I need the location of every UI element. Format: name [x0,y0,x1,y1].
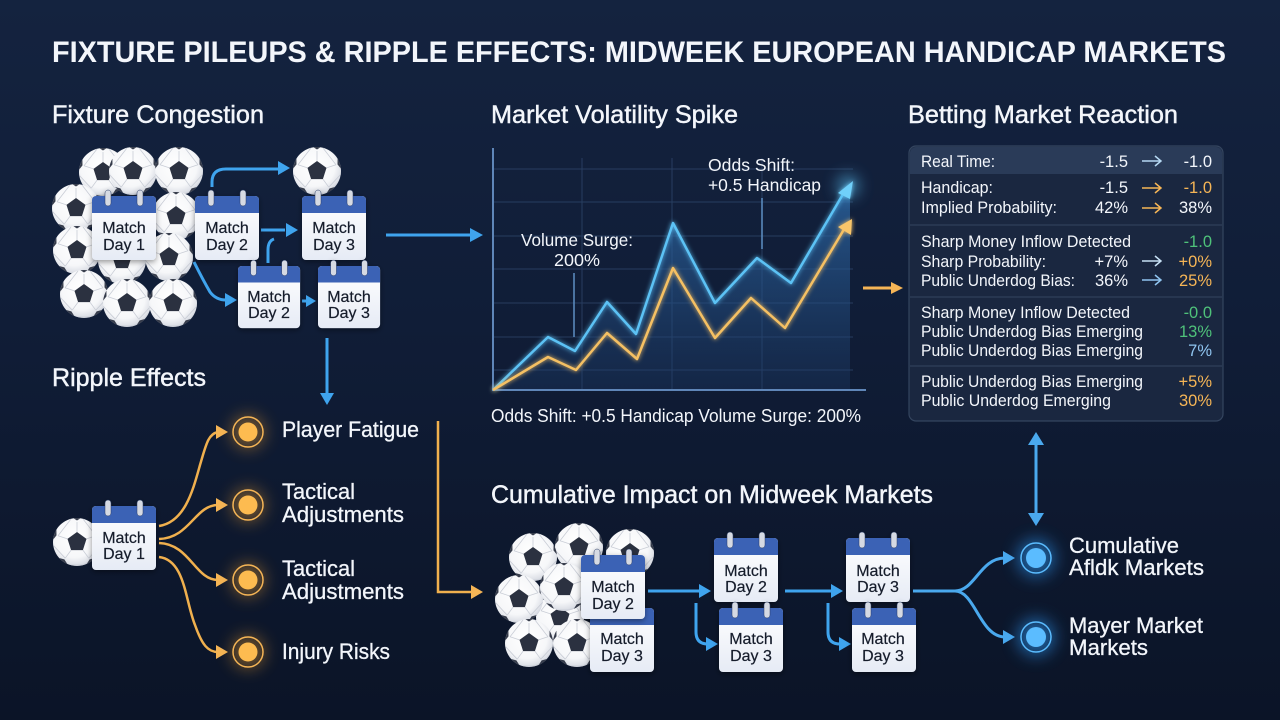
arrows: congestion flow [194,161,316,307]
arrow: two-way market link [1028,432,1044,526]
row: underdog emerging 30 percent: 30% [1179,392,1212,410]
calendar: right match day 3 upper [846,532,910,602]
calendar: right match day 3 lower: Day 3 [862,648,904,665]
row: sharp probability: +0% [1179,253,1212,271]
label: mayer market: Markets [1069,635,1148,660]
row: real time: -1.5 [1100,153,1128,171]
calendar: middle match day 2 [714,532,778,602]
calendar: match day 3 lower: Match [327,289,371,306]
arrow: ripple effects to cumulative impact [438,421,483,599]
panel: fixture congestion diagram [51,146,380,328]
calendar: match day 2 in pile [581,549,645,619]
heading: ripple effects: Ripple Effects [52,364,206,392]
row: bias emerging 7 percent: Public Underdog Bias Emerging [921,342,1143,360]
label: tactical adjustments 1 [282,479,404,527]
row: sharp probability: Sharp Probability: [921,253,1046,271]
series: volume line amber [493,219,852,390]
node: tactical adjustments 1 [231,488,265,522]
calendar: middle match day 3: Day 3 [730,648,772,665]
row: bias emerging 5 percent: +5% [1179,373,1212,391]
leader lines [574,198,762,337]
calendar: match day 3 [302,190,366,260]
panel: ripple effects diagram [52,415,419,669]
calendar: right match day 3 lower: Match [861,631,905,648]
arrow: congestion to ripple effects [320,338,334,405]
calendar: match day 2: Match [205,220,249,237]
calendar: lower match day 3 in pile: Match [600,631,644,648]
icon: soccer ball group [494,522,655,667]
node: mayer market [1017,618,1055,656]
row: sharp money inflow: Sharp Money Inflow Detected [921,233,1131,251]
row: bias emerging 13 percent: 13% [1179,323,1212,341]
heading: fixture congestion: Fixture Congestion [52,101,264,129]
heading: market volatility spike: Market Volatility Spike [491,101,738,129]
calendar: middle match day 3 [719,602,783,672]
row: bias emerging 13 percent: Public Underdog Bias Emerging [921,323,1143,341]
row: underdog emerging 30 percent: Public Underdog Emerging [921,392,1111,410]
label: tactical adjustments 2 [282,556,404,604]
calendar: match day 2 in pile: Match [591,579,635,596]
row: implied probability: 42% [1095,199,1128,217]
label: player fatigue: Player Fatigue [282,417,419,442]
label: injury risks: Injury Risks [282,639,390,664]
heading: betting market reaction: Betting Market Reaction [908,101,1178,129]
callout: volume surge: Volume Surge: [521,230,633,250]
label: mayer market [1069,613,1203,660]
row: sharp money inflow second: -0.0 [1184,304,1212,322]
row: bias emerging 5 percent: Public Underdog Bias Emerging [921,373,1143,391]
calendar: match day 3 lower: Day 3 [328,305,370,322]
label: tactical adjustments 2: Adjustments [282,579,404,604]
calendar: middle match day 2: Day 2 [725,579,767,596]
node: player fatigue [231,415,265,449]
chart axes [493,148,866,390]
calendar: match day 2: Day 2 [206,237,248,254]
calendar: match day 1 source: Match [102,530,146,547]
arrow: congestion to chart [386,228,483,242]
chart area fill [493,183,850,390]
row: sharp probability [921,253,1212,271]
calendar: match day 3: Day 3 [313,237,355,254]
calendar: right match day 3 upper: Match [856,563,900,580]
label: cumulative markets: Cumulative [1069,533,1179,558]
line chart: market volatility [493,148,866,390]
calendar: match day 2 [195,190,259,260]
row: handicap: Handicap: [921,179,993,197]
row: sharp probability: +7% [1095,253,1128,271]
row: implied probability [921,199,1212,217]
calendar: match day 3: Match [312,220,356,237]
row: sharp money inflow second: Sharp Money Inflow Detected [921,304,1130,322]
calendar: match day 2 lower: Day 2 [248,305,290,322]
arrow: chart to market reaction [863,282,903,294]
row: handicap [921,179,1212,197]
row: real time: Real Time: [921,153,995,171]
arrows: ripple branches [159,425,228,659]
calendar: match day 1: Match [102,220,146,237]
row: sharp money inflow: -1.0 [1184,233,1212,251]
label: cumulative markets: Afldk Markets [1069,555,1204,580]
row: public underdog bias: Public Underdog Bias: [921,272,1075,290]
calendar: middle match day 3: Match [729,631,773,648]
row: implied probability: 38% [1179,199,1212,217]
calendar: match day 1 source [92,500,156,570]
title: FIXTURE PILEUPS & RIPPLE EFFECTS: MIDWEEK EUROPEAN HANDICAP MARKETS [52,36,1226,69]
calendar: right match day 3 upper: Day 3 [857,579,899,596]
label: tactical adjustments 2: Tactical [282,556,355,581]
arrows: cumulative flow [648,584,955,651]
row: real time: -1.0 [1184,153,1212,171]
row: underdog emerging 30 percent [921,392,1212,410]
label: tactical adjustments 1: Adjustments [282,502,404,527]
series: odds line blue [493,181,853,390]
arrows: split to market outcomes [913,551,1015,644]
calendar: match day 3 lower [318,260,380,328]
calendar: middle match day 2: Match [724,563,768,580]
row: public underdog bias [921,272,1212,290]
callout: 200 percent: 200% [554,250,600,270]
arrow tip glow blue [838,176,858,196]
label: mayer market: Mayer Market [1069,613,1203,638]
node: cumulative markets [1017,539,1055,577]
calendar: match day 2 lower [238,260,300,328]
node: tactical adjustments 2 [231,563,265,597]
calendar: match day 2 lower: Match [247,289,291,306]
row: bias emerging 7 percent: 7% [1188,342,1212,360]
icon: soccer ball pile [51,146,342,327]
panel: cumulative impact diagram [494,522,955,672]
calendar: match day 1: Day 1 [103,237,145,254]
icon: soccer ball [52,517,102,566]
callout: handicap: +0.5 Handicap [708,175,821,195]
calendar: lower match day 3 in pile: Day 3 [601,648,643,665]
row: handicap: -1.5 [1100,179,1128,197]
row: implied probability: Implied Probability: [921,199,1057,217]
row: public underdog bias: 25% [1179,272,1212,290]
calendar: match day 1 [92,190,156,260]
row: public underdog bias: 36% [1095,272,1128,290]
calendar: match day 2 in pile: Day 2 [592,596,634,613]
row: handicap: -1.0 [1184,179,1212,197]
panel: betting market table [909,146,1223,421]
callout: odds shift: Odds Shift: [708,155,795,175]
calendar: match day 1 source: Day 1 [103,546,145,563]
label: tactical adjustments 1: Tactical [282,479,355,504]
node: injury risks [231,635,265,669]
calendar: right match day 3 lower [852,602,916,672]
row: real time [921,153,1212,171]
heading: cumulative impact: Cumulative Impact on Midweek Markets [491,481,933,509]
label: cumulative markets [1069,533,1204,580]
chart caption: Odds Shift: +0.5 Handicap Volume Surge: 200% [491,406,861,426]
calendar: lower match day 3 in pile [590,602,654,672]
